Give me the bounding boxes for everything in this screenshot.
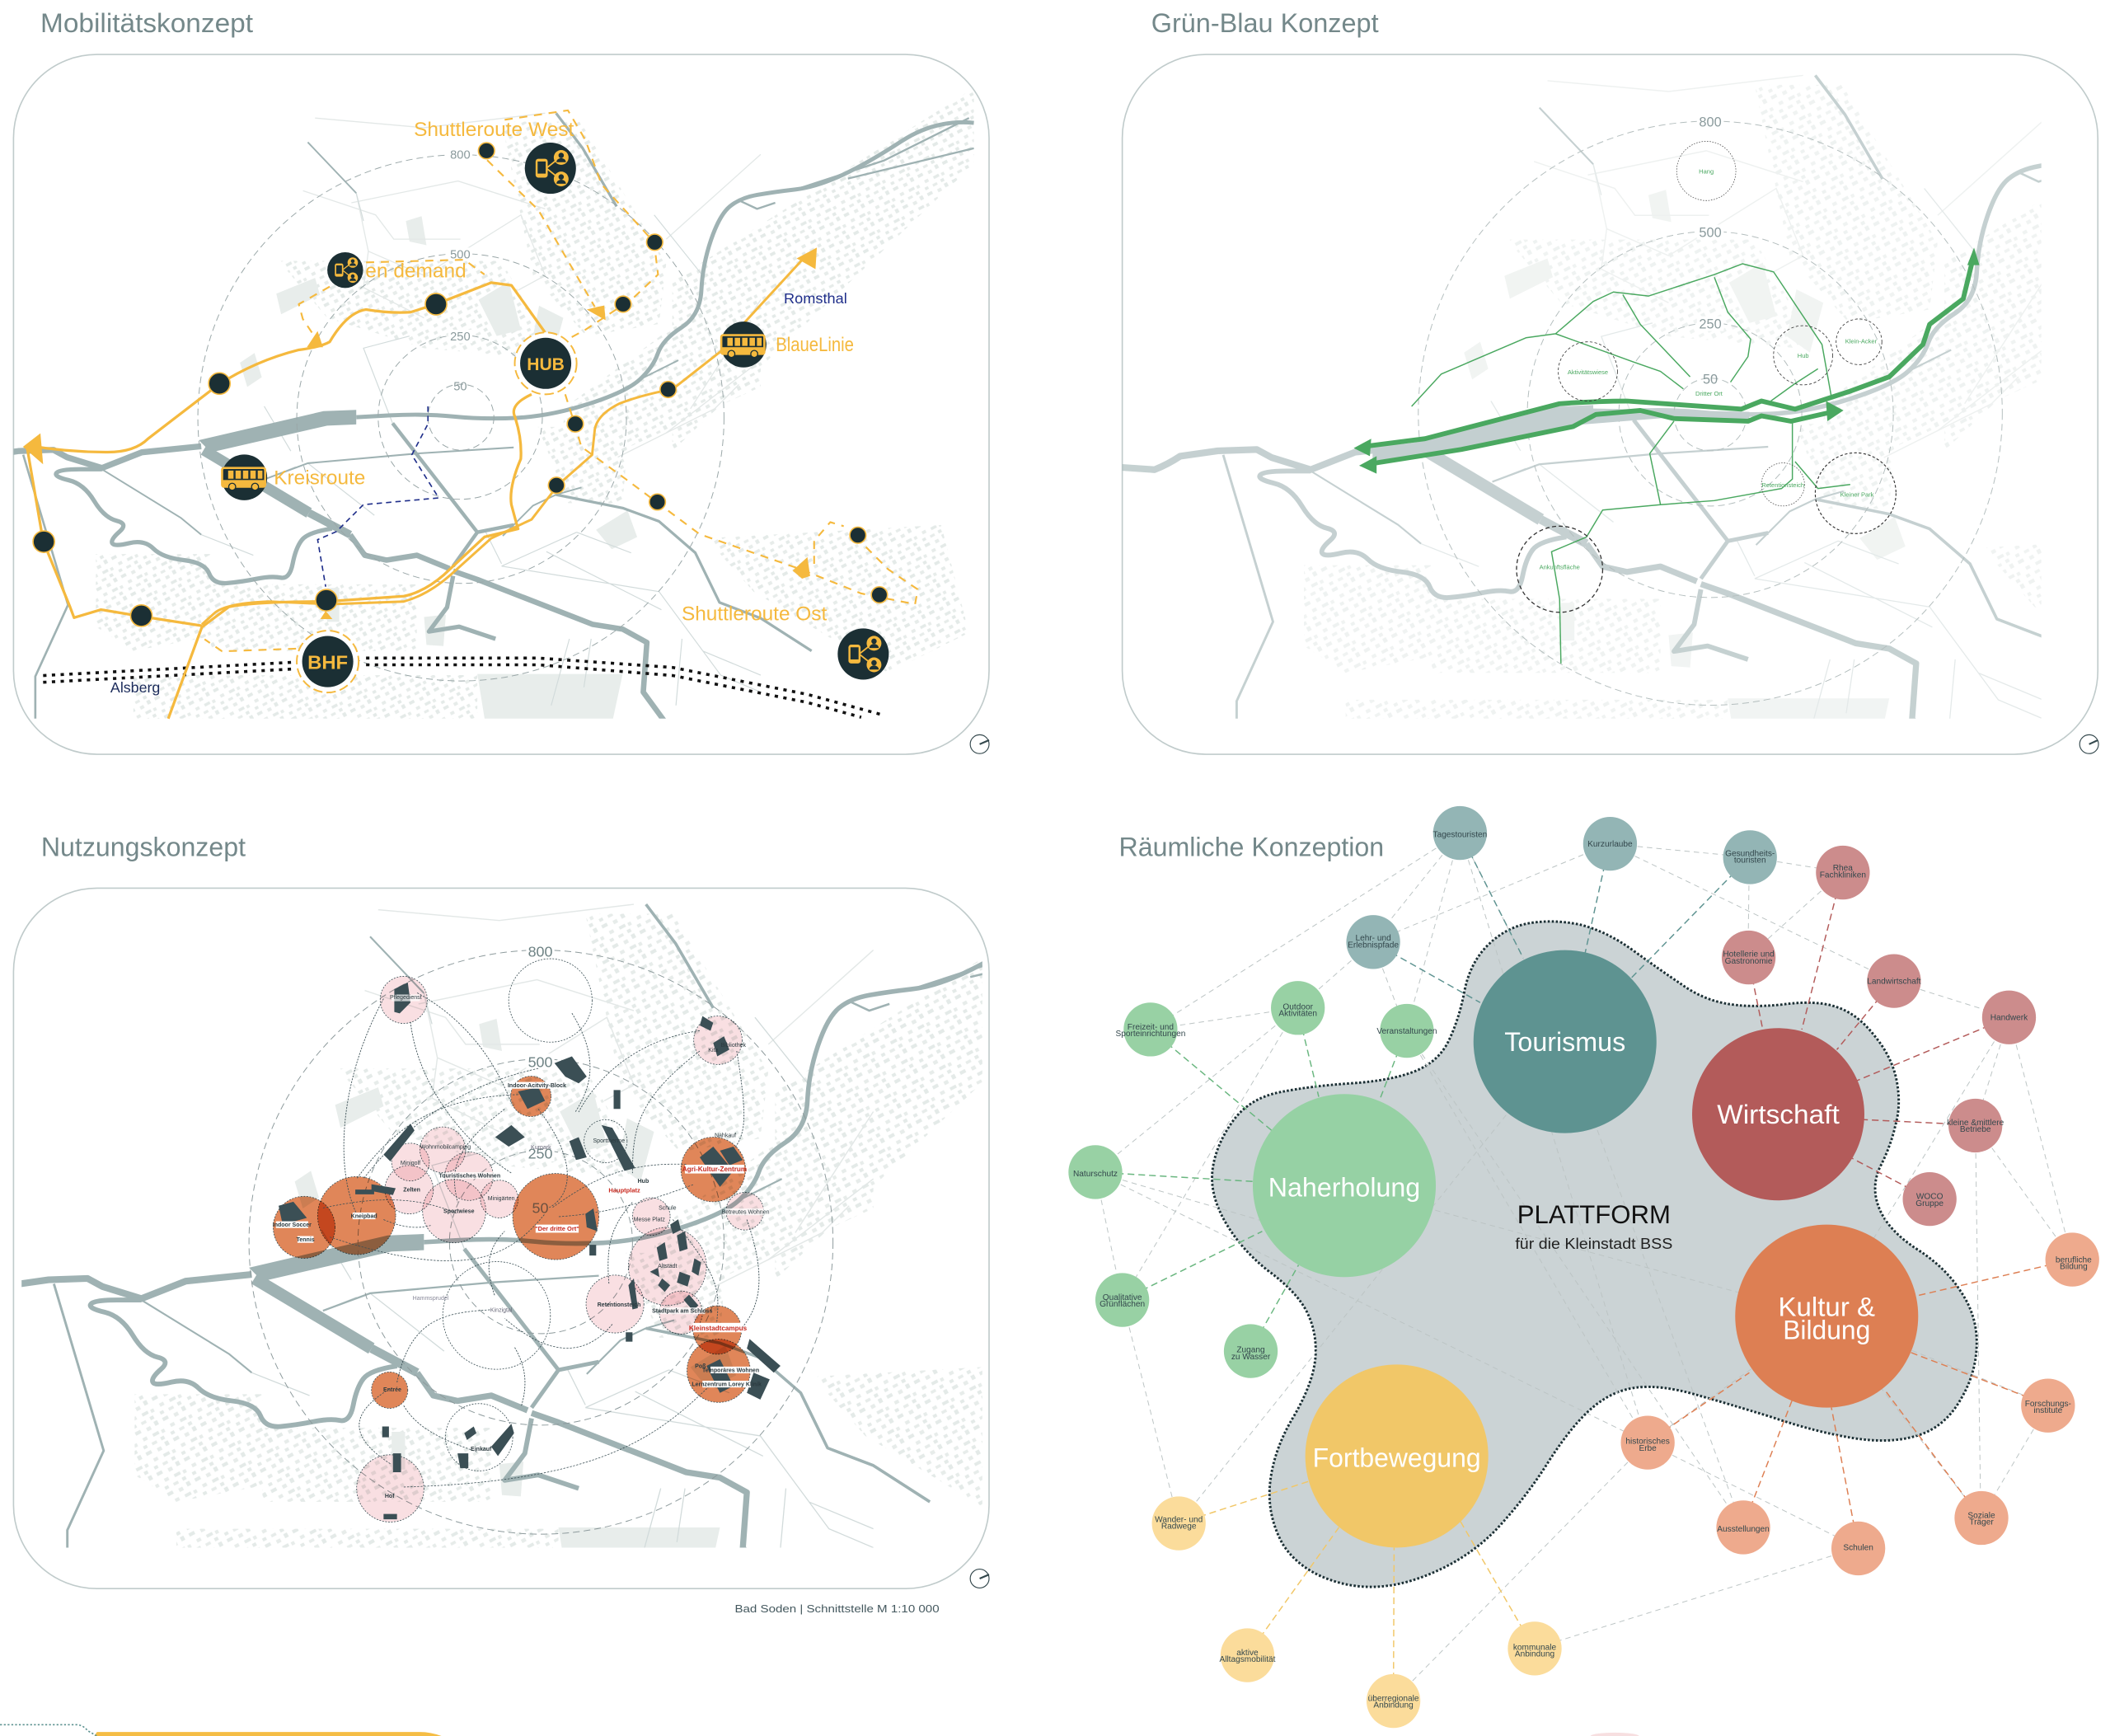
use labels: Tennis bbox=[297, 1237, 315, 1243]
use labels: Schule bbox=[659, 1206, 677, 1212]
icon: on-demand west bbox=[327, 252, 363, 288]
nodes: Fortbewegung: überregionale bbox=[1368, 1695, 1419, 1704]
place labels: Aktivitätswiese bbox=[1568, 368, 1608, 376]
ring labels: 50 bbox=[1703, 372, 1718, 387]
nodes: Tourismus: Kurzurlaube bbox=[1587, 840, 1633, 849]
use labels: Hauptplatz bbox=[608, 1186, 640, 1194]
nodes: Wirtschaft: Landwirtschaft bbox=[1867, 977, 1921, 986]
orange use circles bbox=[273, 1077, 750, 1408]
nodes: Kultur und Bildung: historisches bbox=[1625, 1438, 1670, 1447]
nodes: Naherholung: Aktivitäten bbox=[1278, 1010, 1317, 1019]
use labels: Kneipbad bbox=[351, 1213, 377, 1219]
arrowheads bbox=[1353, 247, 1980, 474]
dashed blue line bbox=[317, 406, 438, 587]
panel: Grün-Blau Konzept bbox=[1076, 7, 2110, 754]
nodes: Wirtschaft: Handwerk bbox=[1990, 1013, 2028, 1022]
hub: Kultur & Bildung: Bildung bbox=[1783, 1314, 1870, 1344]
icon: north arrow bbox=[970, 1569, 989, 1588]
ring labels: 500 bbox=[528, 1054, 553, 1071]
route labels: BlaueLinie bbox=[776, 334, 854, 356]
use labels: Minigärten bbox=[488, 1196, 515, 1202]
ring labels: 800 bbox=[1699, 115, 1722, 129]
arrowheads bbox=[23, 247, 817, 619]
use labels: Hub bbox=[638, 1179, 649, 1185]
nodes: Kultur und Bildung: Erbe bbox=[1639, 1444, 1657, 1453]
hub: BHF bbox=[297, 631, 359, 692]
nodes: Wirtschaft: Fachkliniken bbox=[1820, 870, 1866, 880]
panel: Mobilitätskonzept bbox=[0, 7, 989, 754]
nodes: Kultur und Bildung: institute bbox=[2033, 1406, 2063, 1415]
thick green axis lower bbox=[1367, 411, 1833, 464]
place labels: Hub bbox=[1798, 352, 1809, 359]
icon: bus Blaue Linie bbox=[720, 321, 767, 368]
ring label 50: 50 bbox=[532, 1200, 549, 1217]
nodes: Kultur und Bildung: Ausstellungen bbox=[1717, 1525, 1770, 1534]
use labels bbox=[273, 994, 770, 1499]
route: Blaue Linie bbox=[202, 257, 804, 625]
panel: Nutzungskonzept bbox=[13, 837, 990, 1614]
empty dashed circles bbox=[443, 959, 627, 1471]
place labels: Ankunftsfläche bbox=[1540, 564, 1580, 571]
ring labels bbox=[526, 943, 555, 1162]
base map bbox=[21, 903, 982, 1548]
use labels: Hammsprudel bbox=[413, 1296, 449, 1302]
heading: Mobilitätskonzept: Mobilitätskonzept bbox=[40, 7, 253, 38]
route: Kreisroute bbox=[27, 283, 545, 719]
nodes: Tourismus: touristen bbox=[1734, 856, 1766, 865]
use labels: Bibliothek bbox=[721, 1043, 747, 1049]
use labels: Indoor Soccer bbox=[273, 1222, 312, 1228]
nodes: Fortbewegung: Anbindung bbox=[1373, 1701, 1414, 1710]
relation arcs bbox=[323, 992, 759, 1487]
panel frame bbox=[13, 54, 989, 754]
place labels: Klein-Acker bbox=[1845, 337, 1878, 345]
hub: Kultur & Bildung: Kultur & bbox=[1778, 1292, 1875, 1322]
nodes: Tourismus: Gesundheits- bbox=[1725, 849, 1775, 858]
use labels: Sporttherme bbox=[593, 1138, 625, 1144]
use labels: Minigolf bbox=[401, 1161, 420, 1166]
nodes: Tourismus bbox=[1346, 806, 1777, 969]
nodes: Wirtschaft: Gruppe bbox=[1915, 1199, 1944, 1208]
hub: HUB: HUB bbox=[527, 355, 565, 374]
hub: Fortbewegung bbox=[1306, 1364, 1489, 1547]
nodes: Fortbewegung: Alltagsmobilität bbox=[1219, 1655, 1276, 1664]
nodes: Naherholung: Sporteinrichtungen bbox=[1115, 1030, 1185, 1039]
nodes: Naherholung bbox=[1068, 981, 1437, 1378]
ring labels: 800 bbox=[528, 944, 553, 960]
nodes: Kultur und Bildung: Schulen bbox=[1843, 1544, 1873, 1553]
hub: Wirtschaft bbox=[1692, 1028, 1864, 1200]
distance rings bbox=[249, 950, 833, 1534]
use labels: Lernzentrum Lorey Klinik bbox=[692, 1382, 762, 1388]
base map bbox=[0, 87, 974, 724]
icon: north arrow bbox=[970, 734, 989, 753]
distance rings bbox=[1418, 121, 2002, 705]
icon: on-demand north bbox=[525, 143, 576, 194]
nodes: Fortbewegung: Radwege bbox=[1161, 1523, 1197, 1532]
nodes: Naherholung: Qualitative bbox=[1103, 1293, 1142, 1302]
place labels: Retentionsteich bbox=[1761, 481, 1804, 489]
nodes: Kultur und Bildung: Bildung bbox=[2060, 1263, 2088, 1272]
use labels: Sportwiese bbox=[443, 1209, 475, 1215]
use labels: Entrée bbox=[383, 1387, 401, 1393]
use labels: Messe Platz bbox=[634, 1218, 665, 1223]
icon: on-demand east bbox=[837, 628, 889, 679]
use labels: "Der dritte Ort" bbox=[535, 1225, 579, 1232]
nodes: Wirtschaft: Rhea bbox=[1833, 864, 1853, 873]
nodes: Naherholung: Freizeit- und bbox=[1128, 1023, 1174, 1032]
grey network lines bbox=[1095, 833, 2072, 1701]
nodes: Wirtschaft: Gastronomie bbox=[1725, 957, 1773, 966]
nodes: Kultur und Bildung bbox=[1620, 1232, 2099, 1575]
panel frame bbox=[1123, 54, 2098, 754]
stations bbox=[33, 143, 888, 626]
distance rings bbox=[198, 155, 724, 681]
nodes: Tourismus: Lehr- und bbox=[1355, 934, 1391, 943]
ring labels: 50 bbox=[453, 380, 467, 393]
place labels: Dritter Ort bbox=[1695, 390, 1723, 397]
center label: für die Kleinstadt BSS bbox=[1515, 1235, 1672, 1252]
route labels: Shuttleroute Ost bbox=[682, 603, 827, 626]
icon: north arrow bbox=[2080, 734, 2098, 753]
use labels: Kleinstadtcampus bbox=[689, 1325, 748, 1332]
route labels: en demand bbox=[365, 260, 467, 282]
nodes: Wirtschaft: Hotellerie und bbox=[1723, 950, 1775, 959]
hub: Kultur & Bildung bbox=[1735, 1225, 1918, 1408]
nodes: Fortbewegung: aktive bbox=[1236, 1649, 1259, 1658]
use labels: Touristisches Wohnen bbox=[439, 1173, 500, 1179]
cropped next section: yellow band and dotted outline bbox=[0, 1724, 1639, 1736]
route labels: Alsberg bbox=[110, 679, 160, 696]
use labels: Agri-Kultur-Zentrum bbox=[682, 1166, 747, 1173]
icon: bus Kreisroute bbox=[222, 454, 267, 500]
use labels: Nahkauf bbox=[715, 1133, 736, 1139]
hub: Naherholung bbox=[1253, 1094, 1436, 1277]
ring labels bbox=[1697, 115, 1723, 387]
use labels: Temporäres Wohnen bbox=[702, 1368, 759, 1373]
shuttle dashed routes bbox=[204, 110, 917, 651]
pink use circles bbox=[357, 976, 764, 1522]
ring labels: 250 bbox=[528, 1146, 553, 1162]
heading: Nutzungskonzept: Nutzungskonzept bbox=[41, 831, 246, 861]
nodes: Naherholung: Zugang bbox=[1236, 1346, 1265, 1355]
nodes: Naherholung: Veranstaltungen bbox=[1376, 1027, 1437, 1036]
nodes: Naherholung: zu Wasser bbox=[1231, 1353, 1271, 1362]
nodes: Wirtschaft: kleine &mittlere bbox=[1947, 1119, 2004, 1128]
rail line bbox=[43, 658, 881, 717]
hub: Tourismus bbox=[1474, 950, 1657, 1133]
hub: Tourismus: Tourismus bbox=[1504, 1026, 1625, 1057]
panel frame bbox=[13, 888, 989, 1588]
nodes: Wirtschaft bbox=[1722, 846, 2036, 1226]
nodes: Naherholung: Outdoor bbox=[1282, 1002, 1314, 1011]
use labels: Hof bbox=[385, 1494, 395, 1499]
place labels bbox=[1540, 168, 1878, 571]
thin green paths bbox=[1412, 264, 1850, 664]
platform blob bbox=[1212, 922, 1976, 1587]
scale caption: Bad Soden | Schnittstelle M 1:10 000 bbox=[734, 1602, 940, 1615]
hub: Wirtschaft: Wirtschaft bbox=[1717, 1099, 1840, 1129]
use labels: Zelten bbox=[403, 1188, 420, 1194]
ring labels: 250 bbox=[1699, 317, 1722, 331]
use labels: Kurpark bbox=[531, 1145, 551, 1151]
use labels: Retentionsteich bbox=[598, 1302, 640, 1308]
use labels: Kita bbox=[708, 1048, 718, 1053]
nodes: Fortbewegung: Wander- und bbox=[1155, 1515, 1203, 1524]
dark buildings bbox=[279, 983, 781, 1519]
thick green axis upper bbox=[1362, 260, 1972, 447]
nodes: Fortbewegung: kommunale bbox=[1513, 1644, 1557, 1653]
use labels: Pflegedienst bbox=[390, 995, 422, 1001]
nodes: Tourismus: Tagestouristen bbox=[1433, 830, 1487, 839]
nodes: Wirtschaft: WOCO bbox=[1916, 1193, 1944, 1202]
ring labels: 500 bbox=[450, 248, 471, 261]
ring labels: 250 bbox=[450, 331, 471, 344]
nodes: Kultur und Bildung: berufliche bbox=[2056, 1255, 2092, 1264]
use labels: Stadtpark am Schloss bbox=[652, 1309, 713, 1315]
center label bbox=[1515, 1200, 1672, 1252]
nodes: Fortbewegung: Anbindung bbox=[1515, 1650, 1554, 1659]
ring labels: 500 bbox=[1699, 225, 1722, 240]
panel: Räumliche Konzeption bbox=[1068, 806, 2099, 1728]
route labels: Romsthal bbox=[784, 290, 847, 307]
grey channel between green axes bbox=[1372, 408, 1749, 463]
nodes: Kultur und Bildung: Träger bbox=[1969, 1518, 1994, 1527]
use labels: Einkauf bbox=[471, 1447, 492, 1452]
heading: Räumliche Konzeption: Räumliche Konzeption bbox=[1119, 831, 1384, 861]
nodes: Naherholung: Grünflächen bbox=[1100, 1300, 1145, 1309]
nodes: Naherholung: Naturschutz bbox=[1073, 1170, 1118, 1179]
nodes: Fortbewegung bbox=[1152, 1496, 1562, 1728]
route labels bbox=[110, 119, 854, 696]
coloured connectors bbox=[1095, 833, 2072, 1701]
hub: Fortbewegung: Fortbewegung bbox=[1313, 1442, 1481, 1472]
center label: PLATTFORM bbox=[1517, 1200, 1671, 1229]
use labels: Indoor-Acitvity-Block bbox=[508, 1083, 566, 1089]
hub: BHF: BHF bbox=[307, 651, 348, 673]
ring labels bbox=[448, 148, 472, 393]
nodes: Kultur und Bildung: Soziale bbox=[1967, 1512, 1995, 1521]
use labels: Poß bbox=[695, 1363, 706, 1369]
place labels: Kleiner Park bbox=[1840, 490, 1874, 498]
use labels: Betreutes Wohnen bbox=[722, 1210, 770, 1216]
hub: HUB bbox=[515, 332, 577, 394]
route labels: Kreisroute bbox=[274, 467, 365, 490]
use labels: Altstadt bbox=[658, 1264, 678, 1269]
use labels: Wohnmobilcamping bbox=[420, 1144, 471, 1150]
dashed places bbox=[1517, 141, 1896, 612]
nodes: Kultur und Bildung: Forschungs- bbox=[2025, 1400, 2071, 1409]
hub: Naherholung: Naherholung bbox=[1268, 1171, 1420, 1202]
place labels: Hang bbox=[1699, 168, 1714, 176]
heading: Grün-Blau Konzept: Grün-Blau Konzept bbox=[1151, 7, 1379, 38]
nodes: Tourismus: Erlebnispfade bbox=[1348, 941, 1399, 950]
nodes: Wirtschaft: Betriebe bbox=[1960, 1125, 1991, 1134]
route labels: Shuttleroute West bbox=[414, 119, 574, 141]
ring labels: 800 bbox=[450, 149, 471, 162]
base map bbox=[1123, 74, 2042, 719]
use labels: Kinzigtal bbox=[490, 1308, 513, 1314]
